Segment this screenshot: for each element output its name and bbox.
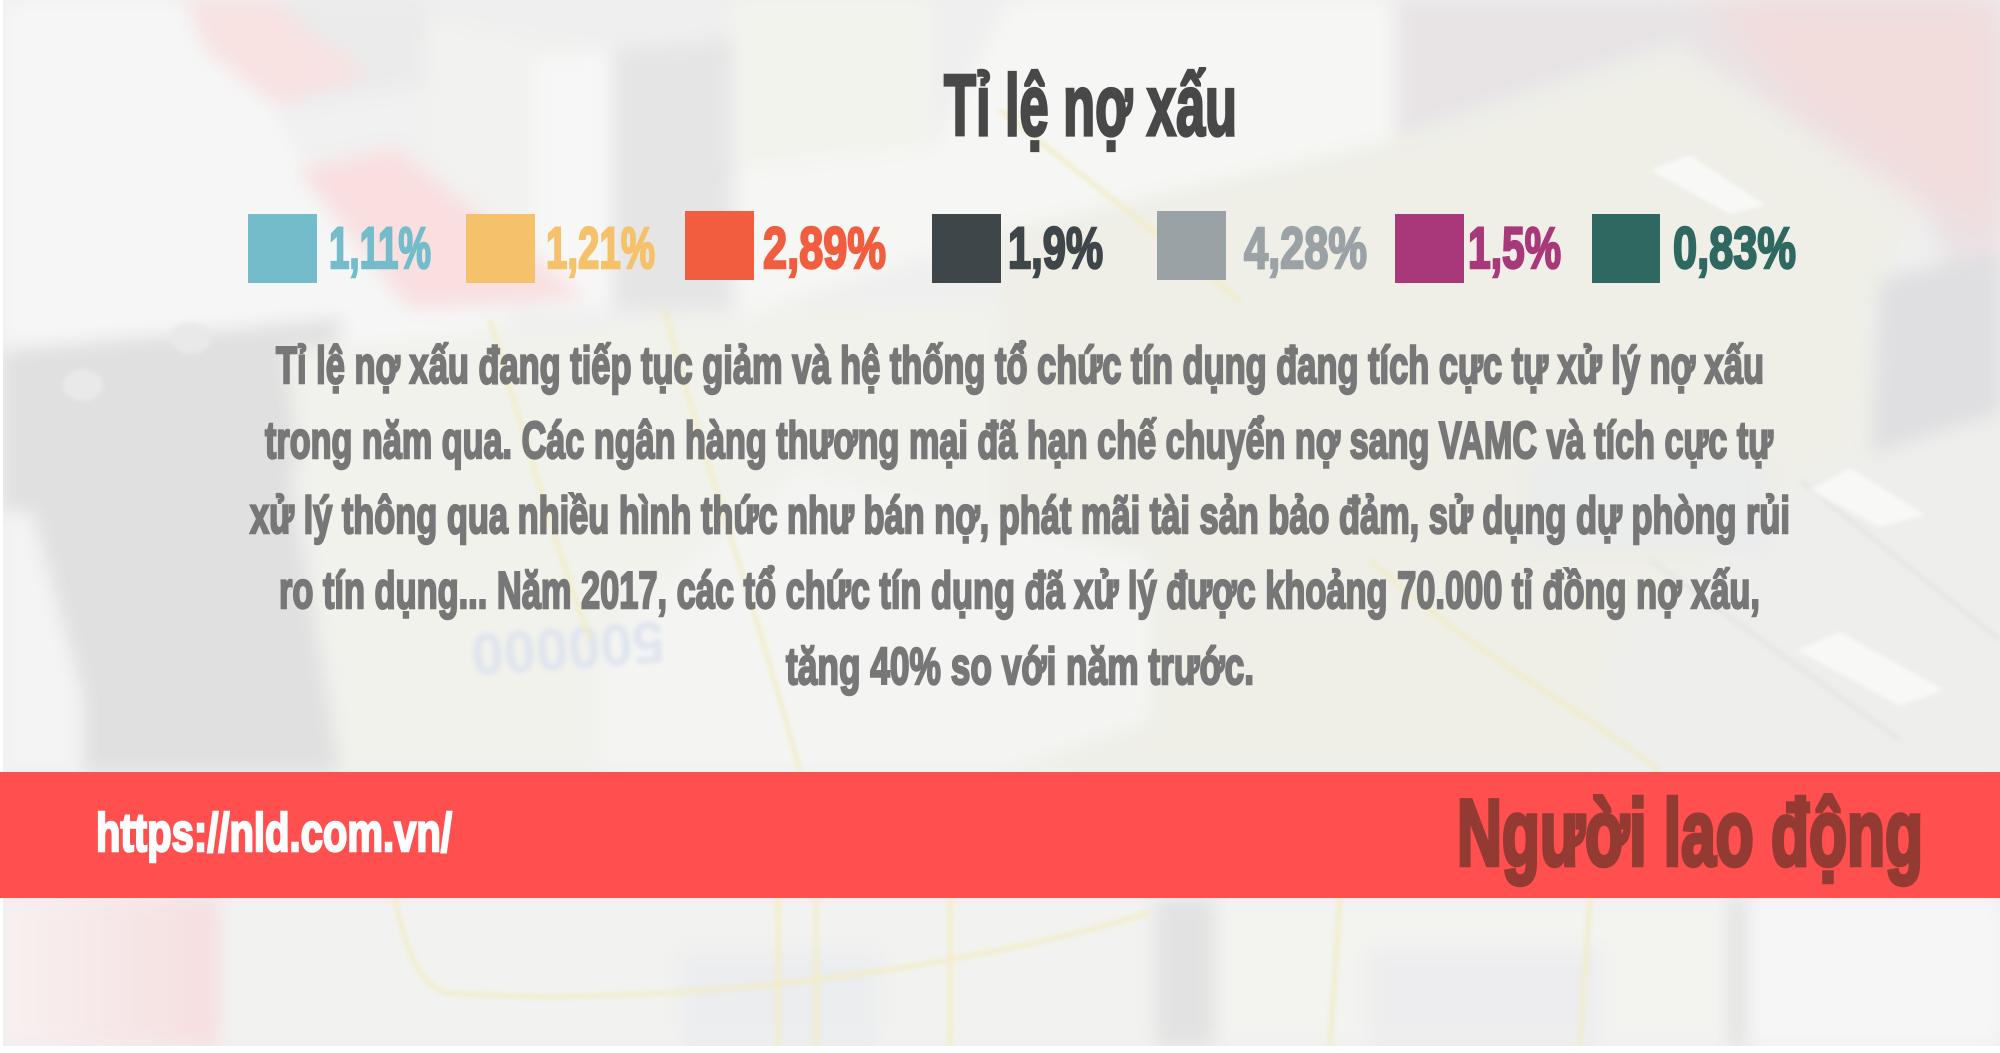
legend item: 1,5% xyxy=(1395,214,1561,283)
legend item: 1,9%: 1,9% xyxy=(1008,216,1103,281)
footer url: https://nld.com.vn/ xyxy=(96,803,452,863)
legend item: 4,28% xyxy=(1157,211,1367,281)
legend item: 1,11%: 1,11% xyxy=(329,216,431,281)
legend item: 2,89%: 2,89% xyxy=(763,216,886,281)
background: stack edge lines xyxy=(1650,480,2000,740)
legend xyxy=(248,211,1796,283)
body paragraph xyxy=(250,337,1790,696)
background: paper tabs xyxy=(1650,155,1944,706)
footer band xyxy=(0,772,2000,898)
legend item: 1,21% xyxy=(466,214,655,283)
body paragraph: tăng 40% so với năm trước. xyxy=(786,638,1254,696)
legend item: 1,21%: 1,21% xyxy=(546,216,655,281)
legend item: 2,89% xyxy=(685,211,886,281)
legend item: 4,28%: 4,28% xyxy=(1244,216,1367,281)
legend item: 0,83%: 0,83% xyxy=(1673,216,1796,281)
legend item: 1,9% xyxy=(932,214,1103,283)
legend item: 1,11% xyxy=(248,214,431,283)
legend item: 1,5%: 1,5% xyxy=(1468,216,1561,281)
legend item: 0,83% xyxy=(1592,214,1796,283)
background: rubber bands xyxy=(395,110,1660,1046)
background: banknote denomination: 500000 xyxy=(469,608,667,687)
title: Tỉ lệ nợ xấu xyxy=(944,58,1237,154)
background: machine buttons xyxy=(63,322,211,401)
